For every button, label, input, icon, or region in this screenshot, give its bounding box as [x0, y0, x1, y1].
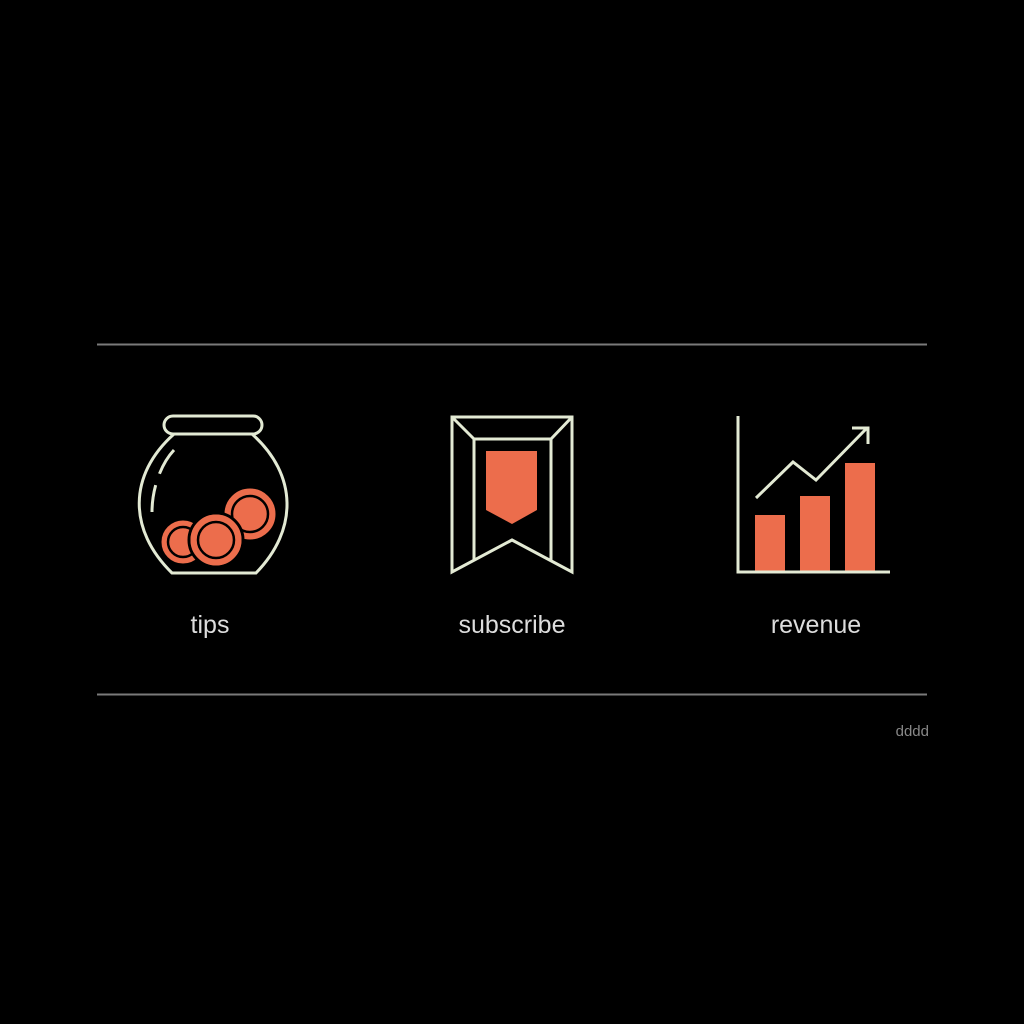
icon: tip jar — [139, 416, 287, 573]
label: revenue: revenue — [771, 611, 861, 639]
label: tips: tips — [191, 611, 229, 639]
icon: revenue chart — [738, 416, 890, 572]
footer text: dddd — [896, 723, 929, 740]
icon: subscribe bookmark — [452, 417, 572, 572]
label: subscribe: subscribe — [458, 611, 566, 639]
